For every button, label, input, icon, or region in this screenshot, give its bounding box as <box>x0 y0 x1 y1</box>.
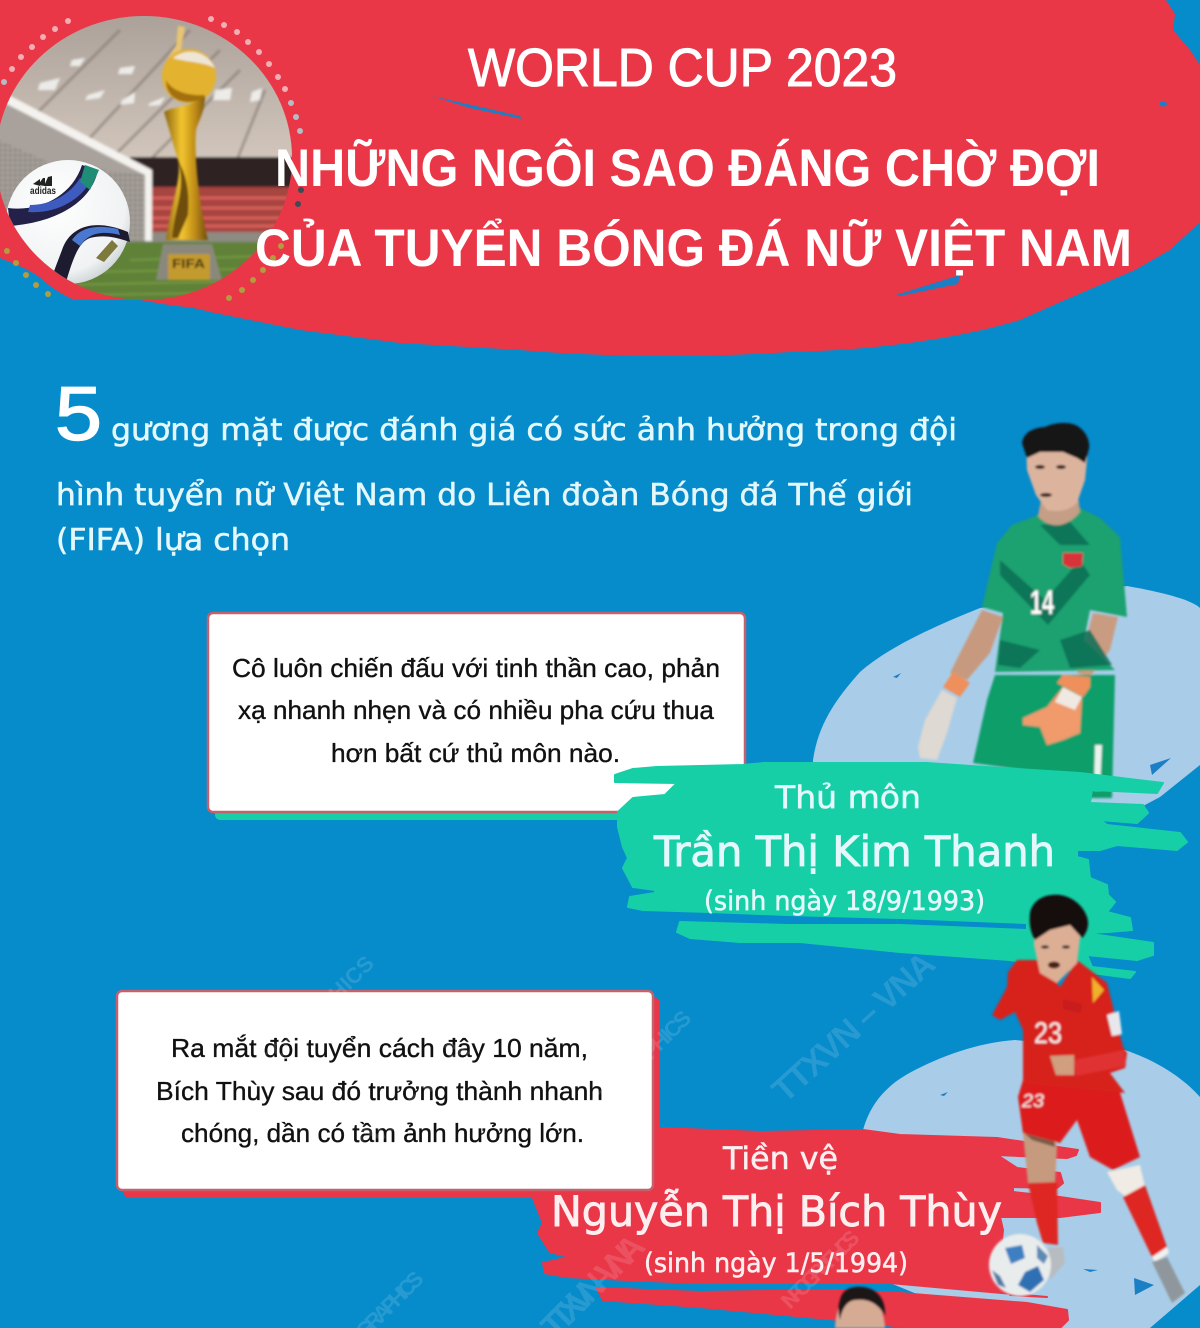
blue wave overlaying the photo <box>0 258 210 330</box>
card shadow <box>215 621 745 820</box>
face <box>1034 918 1082 983</box>
right sock <box>1123 1185 1167 1257</box>
shorts number: 23 <box>1021 1091 1044 1111</box>
forearm <box>1074 1050 1126 1076</box>
left glove <box>918 690 957 760</box>
watermarks: INFOGRAPHICS <box>576 1005 696 1126</box>
third player head <box>835 1287 885 1328</box>
photo: stadium, goal, ball and trophy <box>0 10 300 302</box>
watermarks: INFOGRAPHICS <box>241 951 379 1089</box>
goal net <box>0 92 150 240</box>
goalkeeper name block <box>653 780 1055 917</box>
watermarks <box>241 945 943 1328</box>
left shoe <box>1048 1247 1065 1280</box>
face <box>1026 440 1087 511</box>
jersey <box>982 508 1127 672</box>
card 1 <box>208 613 745 820</box>
hair <box>1030 895 1088 940</box>
adidas logo text: adidas <box>30 186 56 197</box>
sleeve patch <box>1107 1011 1122 1036</box>
birth date: (sinh ngày 1/5/1994) <box>644 1248 908 1279</box>
green name brush <box>615 763 1187 978</box>
intro line 1: gương mặt được đánh giá có sức ảnh hưởng trong đội <box>111 413 957 448</box>
light blue blob behind midfielder <box>863 1040 1200 1328</box>
watermarks: TTXVN – VNA <box>316 1030 477 1192</box>
big number 5: 5 <box>55 372 102 457</box>
card text: Ra mắt đội tuyển cách đây 10 năm, <box>171 1033 588 1063</box>
football <box>6 160 130 284</box>
title <box>255 38 1132 278</box>
left leg <box>1023 1127 1057 1183</box>
position: Tiền vệ <box>722 1141 838 1177</box>
grass <box>25 240 258 300</box>
name: Trần Thị Kim Thanh <box>653 827 1055 876</box>
title line 2: NHỮNG NGÔI SAO ĐÁNG CHỜ ĐỢI <box>275 137 1100 198</box>
jersey number 23: 23 <box>1034 1017 1062 1050</box>
intro text <box>55 372 957 558</box>
small blue flecks on blob <box>893 673 1171 775</box>
blue flecks on midfielder blob <box>940 1092 1154 1295</box>
card box <box>208 613 745 812</box>
card box <box>117 991 653 1190</box>
title line 3: CỦA TUYỂN BÓNG ĐÁ NỮ VIỆT NAM <box>255 217 1132 278</box>
title line 1: WORLD CUP 2023 <box>468 38 897 98</box>
card text: Cô luôn chiến đấu với tinh thần cao, phản <box>232 653 720 683</box>
player: goalkeeper <box>918 423 1127 798</box>
right bandage <box>1107 1165 1145 1200</box>
watermarks: TTXVN – VNA <box>765 945 943 1110</box>
stadium roof <box>10 16 292 160</box>
hand <box>1050 1055 1074 1075</box>
number 14: 14 <box>1030 584 1054 622</box>
shorts <box>973 675 1115 798</box>
dotted ring around the photo <box>1 16 304 301</box>
right shoe <box>1152 1257 1185 1303</box>
watermarks: INFOGRAPHICS <box>776 1225 864 1314</box>
card 2 <box>117 991 660 1198</box>
left sock <box>1028 1182 1058 1245</box>
hair <box>1022 423 1089 463</box>
card shadow <box>124 998 660 1198</box>
card 1: hơn bất cứ thủ môn nào. <box>331 738 620 768</box>
position: Thủ môn <box>774 780 921 816</box>
trophy <box>156 26 222 280</box>
arms <box>950 610 1003 680</box>
jersey <box>992 960 1127 1093</box>
light blue blob behind goalkeeper <box>813 586 1200 806</box>
goal frame <box>0 88 152 241</box>
intro line 3: (FIFA) lựa chọn <box>56 523 290 558</box>
shorts <box>1018 1080 1140 1170</box>
trophy base label: FIFA <box>172 256 206 271</box>
birth date: (sinh ngày 18/9/1993) <box>704 886 985 917</box>
header red brush shape <box>0 0 1200 356</box>
name: Nguyễn Thị Bích Thùy <box>551 1187 1002 1236</box>
player: midfielder <box>989 895 1185 1303</box>
neck <box>1038 495 1080 525</box>
stands <box>130 157 300 190</box>
red name brush <box>533 1128 1100 1297</box>
red lower brush stroke <box>597 1288 1068 1328</box>
intro line 2: hình tuyển nữ Việt Nam do Liên đoàn Bóng đá Thế giới <box>56 477 913 513</box>
midfielder name block <box>551 1141 1002 1279</box>
card 2: Bích Thùy sau đó trưởng thành nhanh <box>156 1076 603 1106</box>
ball <box>989 1234 1051 1296</box>
card 2: chóng, dần có tầm ảnh hưởng lớn. <box>181 1118 584 1148</box>
right glove <box>1023 687 1082 745</box>
blue flecks in header <box>432 96 1167 296</box>
card 1: xạ nhanh nhẹn và có nhiều pha cứu thua <box>238 695 715 725</box>
